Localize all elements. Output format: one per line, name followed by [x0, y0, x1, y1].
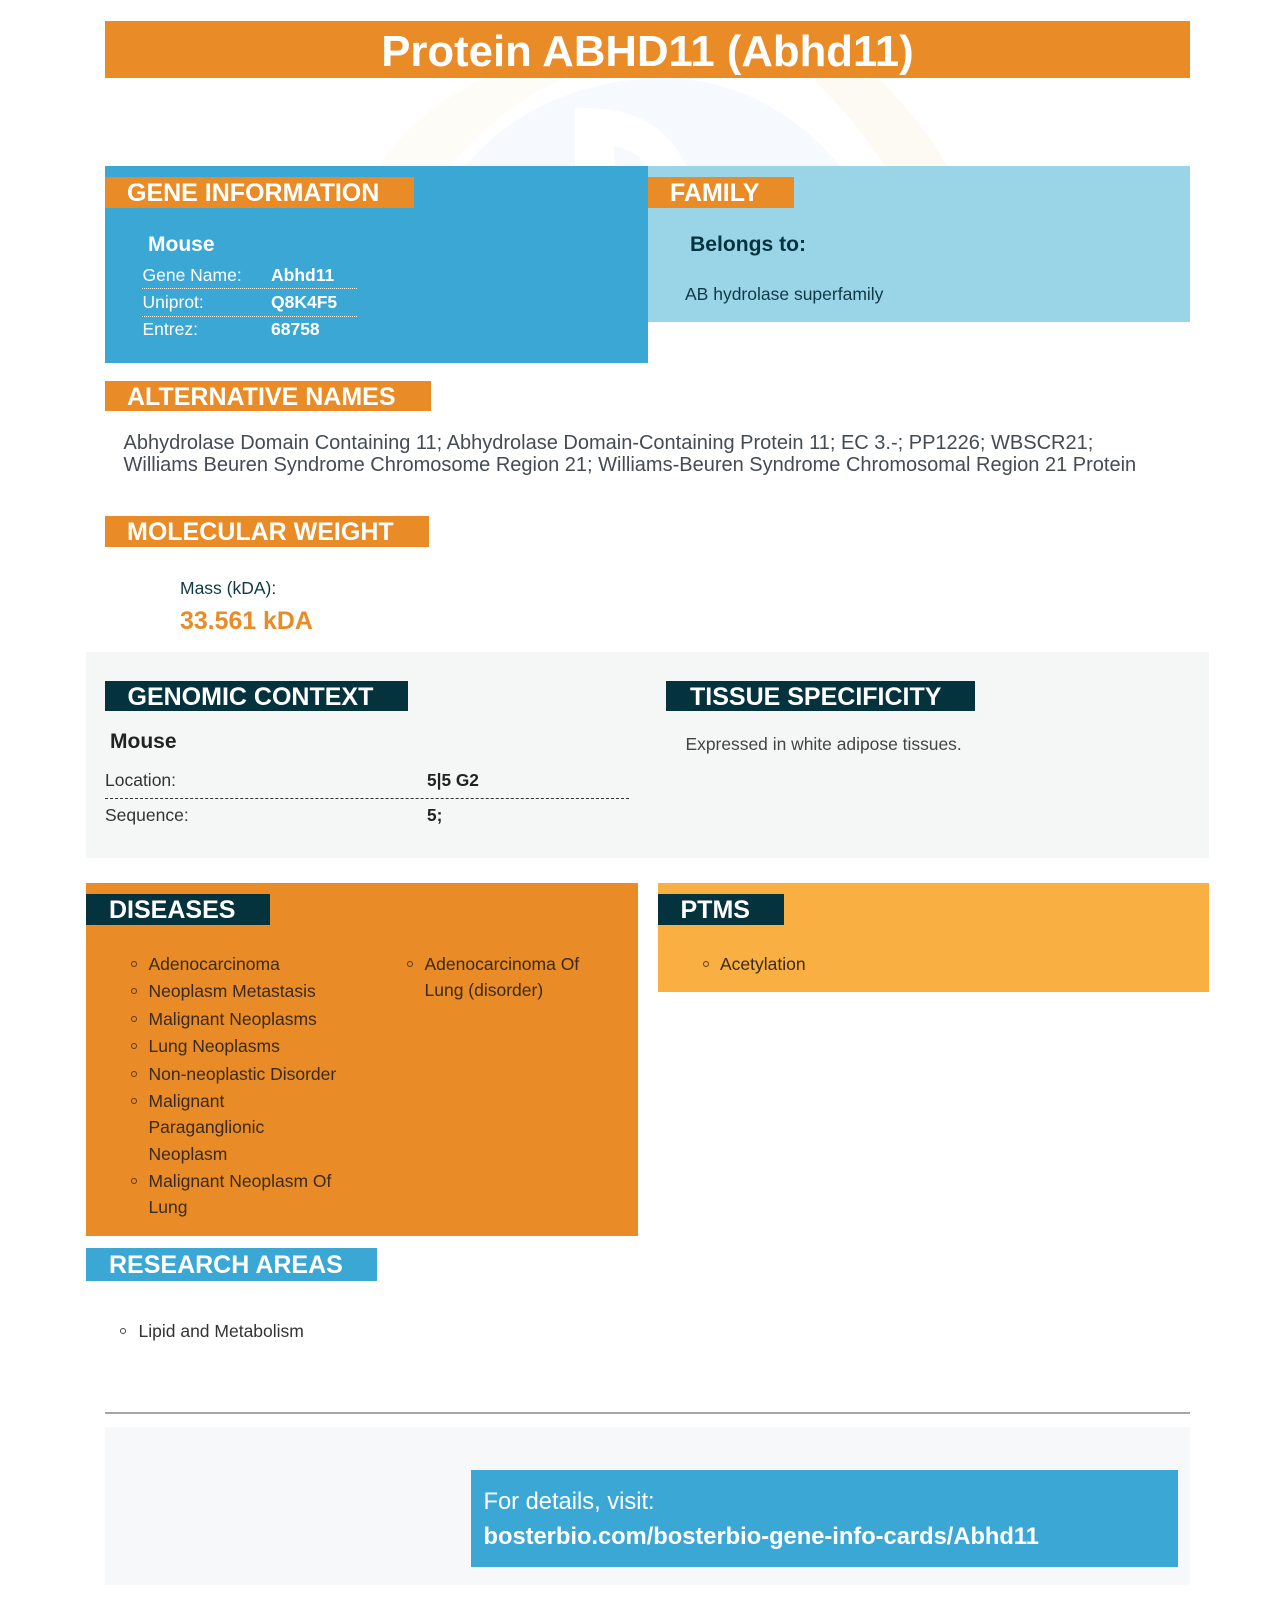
panel: footer	[105, 1427, 1190, 1585]
disease list: Neoplasm	[148, 1144, 227, 1164]
row: sequence: Sequence:	[105, 805, 189, 825]
alternative names text: Williams Beuren Syndrome Chromosome Region 21; Williams-Beuren Syndrome Chromosomal Region 21 Protein	[124, 454, 1136, 476]
panel: gene information	[105, 166, 648, 363]
disease list: Lung (disorder)	[424, 980, 543, 1000]
item	[130, 961, 136, 967]
belongs to label: Belongs to:	[690, 233, 806, 256]
callout label: For details, visit:	[484, 1489, 655, 1515]
heading: alternative names: ALTERNATIVE NAMES	[127, 383, 396, 411]
disease list: Malignant Neoplasms	[148, 1009, 317, 1029]
disease list: Non-neoplastic Disorder	[148, 1064, 336, 1084]
panel: ptms	[658, 883, 1209, 992]
value: entrez: 68758	[271, 319, 320, 339]
row: entrez: Entrez:	[142, 319, 198, 339]
research bullet	[120, 1328, 126, 1334]
divider rule	[105, 1412, 1190, 1414]
panel: family	[648, 166, 1190, 322]
row: uniprot: Uniprot:	[142, 292, 204, 312]
ptm bullet	[703, 961, 709, 967]
mass label: Mass (kDA):	[180, 578, 276, 598]
heading: research areas	[86, 1248, 377, 1281]
heading: molecular weight: MOLECULAR WEIGHT	[127, 518, 394, 546]
panel: genomic context and tissue specificity	[86, 652, 1209, 858]
row: location: Location:	[105, 770, 176, 790]
heading: diseases: DISEASES	[109, 896, 235, 924]
species label: Mouse	[148, 233, 215, 256]
value: location: 5|5 G2	[427, 770, 479, 790]
species label: Mouse	[110, 730, 177, 753]
mass value: 33.561 kDA	[180, 607, 313, 635]
panel: diseases	[86, 883, 638, 1236]
value: sequence: 5;	[427, 805, 442, 825]
disease list: Neoplasm Metastasis	[148, 981, 316, 1001]
disease list: Lung Neoplasms	[148, 1036, 280, 1056]
title: Protein ABHD11 (Abhd11)	[381, 27, 914, 76]
disease list: Malignant	[148, 1091, 224, 1111]
heading: ptms	[658, 894, 784, 925]
disease list: Lung	[148, 1197, 187, 1217]
research item: Lipid and Metabolism	[138, 1321, 304, 1341]
row: gene name: Gene Name:	[142, 265, 242, 285]
alternative names text	[124, 432, 1136, 476]
watermark logo	[380, 78, 946, 166]
value: gene name: Abhd11	[271, 265, 334, 285]
disease list: Paraganglionic	[148, 1117, 264, 1137]
value: uniprot: Q8K4F5	[271, 292, 337, 312]
heading: research areas: RESEARCH AREAS	[109, 1251, 343, 1279]
heading: ptms: PTMS	[680, 896, 750, 924]
title	[105, 21, 1190, 78]
callout url: bosterbio.com/bosterbio-gene-info-cards/Abhd11	[484, 1524, 1039, 1550]
heading: genomic context: GENOMIC CONTEXT	[128, 683, 373, 711]
gene table	[142, 265, 357, 339]
tissue specificity text: Expressed in white adipose tissues.	[686, 734, 962, 754]
heading: tissue specificity: TISSUE SPECIFICITY	[690, 683, 941, 711]
alternative names text: Abhydrolase Domain Containing 11; Abhydrolase Domain-Containing Protein 11; EC 3.-; PP1226; WBSCR21;	[124, 432, 1093, 454]
disease list: Adenocarcinoma Of	[424, 954, 579, 974]
disease list: Malignant Neoplasm Of	[148, 1171, 331, 1191]
heading: family	[648, 177, 794, 208]
family value: AB hydrolase superfamily	[685, 284, 883, 304]
ptm item: Acetylation	[720, 954, 806, 974]
disease list	[131, 954, 580, 1217]
heading: gene information: GENE INFORMATION	[127, 179, 379, 207]
heading: diseases	[86, 894, 270, 925]
callout: details link	[471, 1470, 1178, 1567]
disease list: Adenocarcinoma	[148, 954, 280, 974]
heading: family: FAMILY	[670, 179, 759, 207]
